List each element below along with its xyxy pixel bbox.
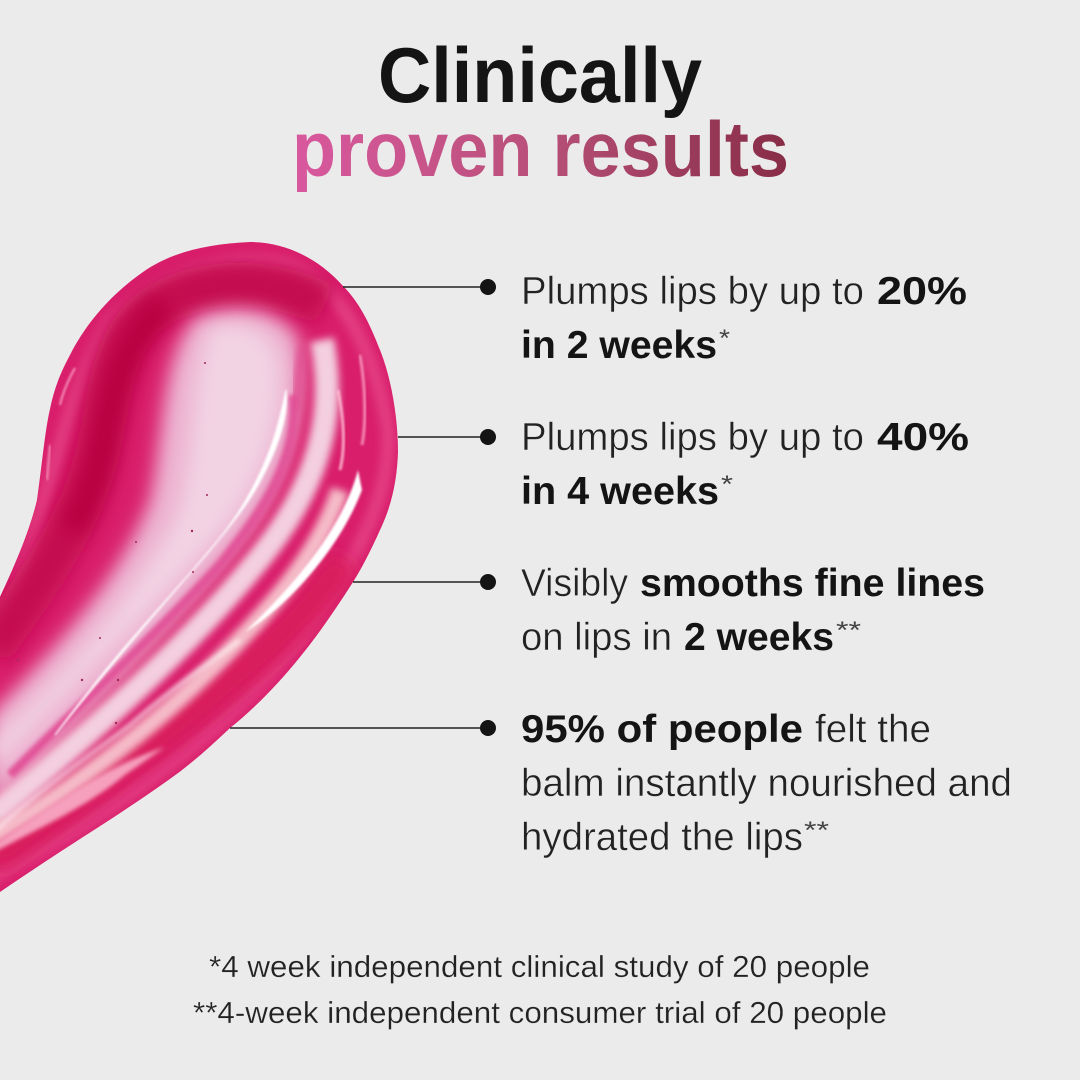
callout: smooths fine lines: ** (836, 617, 861, 644)
callout: smooths fine lines: Visibly (521, 562, 628, 605)
callout: plumps 40%: Plumps lips by up to (521, 416, 864, 459)
pale outer band (0, 340, 327, 818)
callout: 95% of people: 95% of people (521, 708, 803, 751)
callout: plumps 20%: in 2 weeks (521, 324, 717, 367)
callout: smooths fine lines: 2 weeks (684, 616, 834, 659)
callout: smooths fine lines (353, 562, 985, 659)
callout: plumps 40% (398, 416, 969, 513)
specks (17, 362, 208, 724)
bottom rim highlight (0, 747, 165, 854)
peach band (0, 490, 340, 838)
callout: plumps 20%: 20% (877, 270, 967, 313)
image: pink lip balm swatch (0, 230, 410, 900)
callout: 95% of people: balm instantly nourished and (521, 762, 1012, 805)
lower band tint (0, 560, 345, 860)
rim (0, 260, 388, 880)
callout: smooths fine lines: on lips in (521, 616, 672, 659)
callout: 95% of people: felt the (815, 708, 931, 751)
dark crimson fold (0, 285, 325, 650)
callout: 95% of people (230, 708, 1012, 859)
callout: 95% of people: hydrated the lips (521, 816, 803, 859)
callout: plumps 20%: Plumps lips by up to (521, 270, 864, 313)
callout: plumps 40%: * (721, 471, 733, 498)
callout: plumps 40%: 40% (877, 416, 969, 459)
title: Clinically (378, 31, 702, 119)
pale inner area (0, 309, 302, 810)
callout: plumps 20%: * (719, 325, 730, 352)
footnotes: *4 week independent clinical study of 20 people (209, 949, 870, 984)
footnotes (193, 949, 887, 1030)
callout: plumps 40%: in 4 weeks (521, 470, 719, 513)
callout: smooths fine lines: smooths fine lines (640, 562, 985, 605)
title: proven results (292, 105, 789, 193)
inner pink ridge (10, 395, 294, 775)
footnotes: **4-week independent consumer trial of 20 people (193, 995, 887, 1030)
title (292, 31, 789, 193)
callout: 95% of people: ** (804, 817, 829, 844)
callout: plumps 20% (343, 270, 967, 367)
gloss highlights (55, 390, 286, 735)
